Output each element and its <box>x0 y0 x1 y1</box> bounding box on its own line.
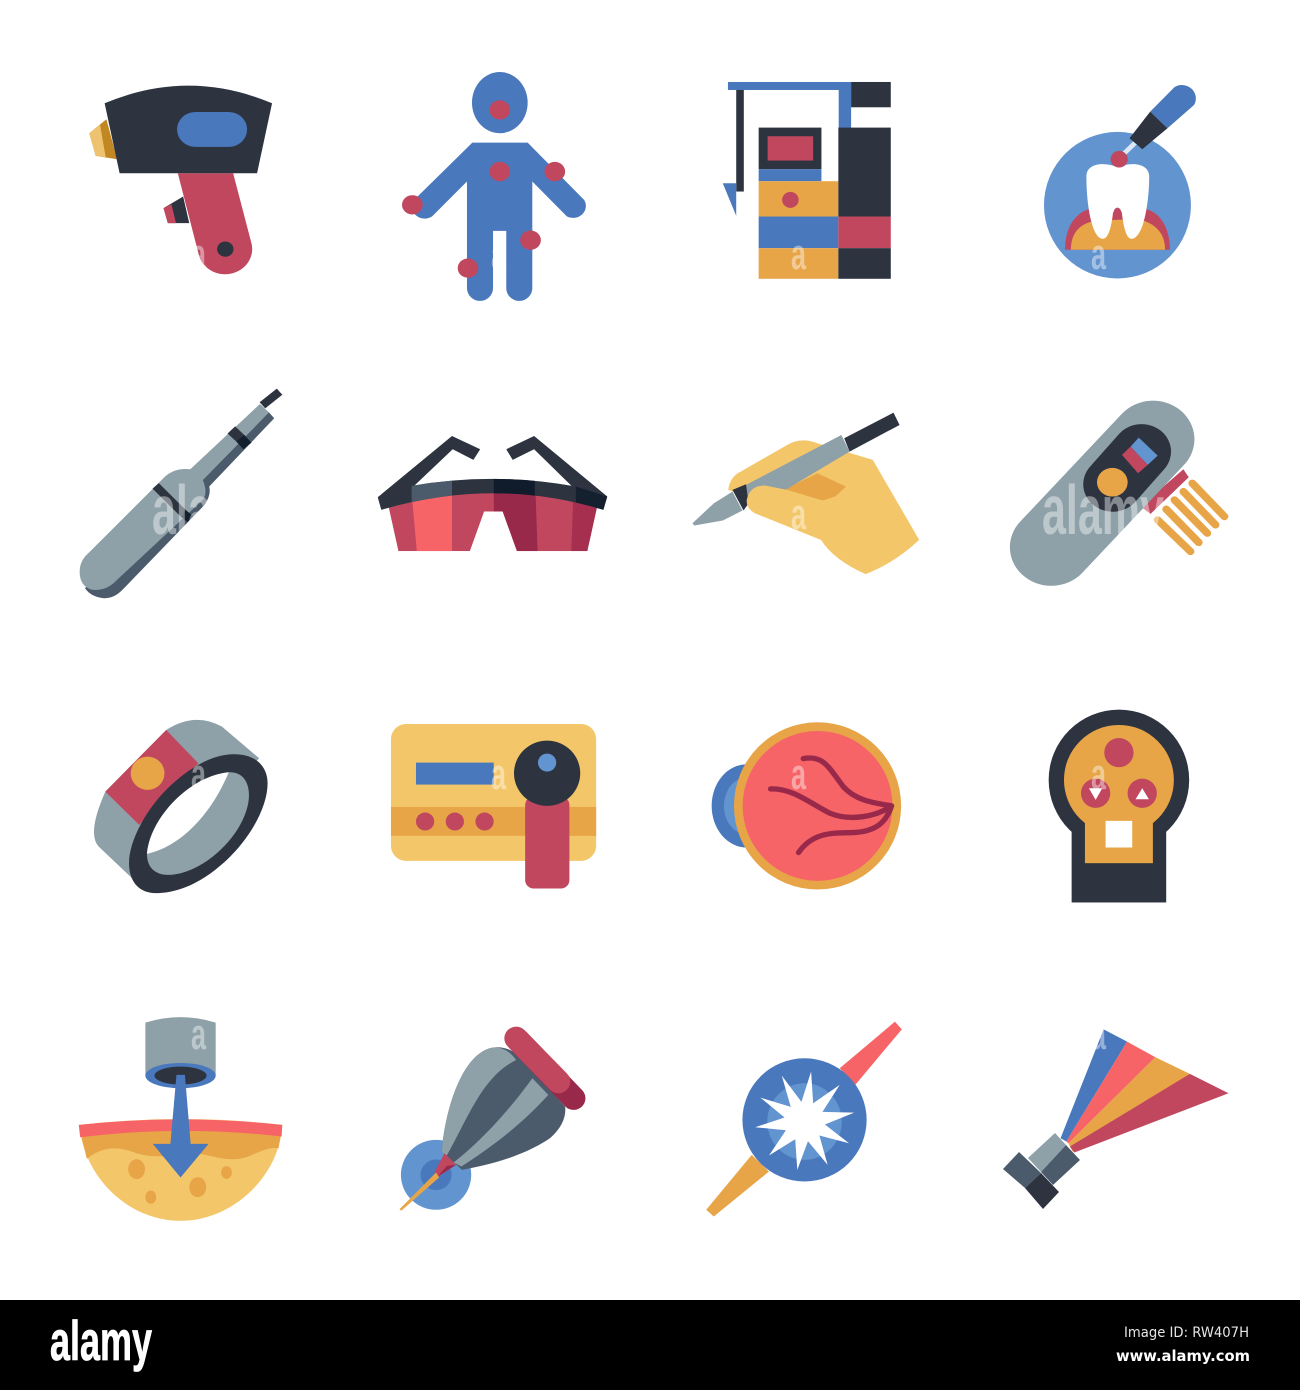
person body <box>412 143 586 301</box>
skin fat layer <box>79 1119 282 1221</box>
tooth background circle <box>1044 132 1191 278</box>
machine screen <box>759 128 821 169</box>
icon: laser applicator on target <box>400 1038 574 1211</box>
icon: protective glasses <box>374 436 610 553</box>
footer bar <box>0 1300 1300 1390</box>
watermark letters <box>152 230 1164 1059</box>
icon: laser control device <box>391 724 596 888</box>
icon: laser machine cabinet <box>723 82 891 279</box>
watermark letters: a <box>491 230 506 279</box>
spectrum beams <box>1061 1029 1229 1153</box>
laser aperture <box>145 1063 216 1088</box>
target circle <box>401 1140 471 1210</box>
machine top block <box>851 82 891 107</box>
ring dot <box>131 757 164 790</box>
scanner beams <box>1158 483 1224 552</box>
laser head <box>145 1017 216 1075</box>
applicator nozzle <box>434 1153 456 1176</box>
projector barrel <box>1028 1133 1080 1185</box>
device handle <box>525 797 569 888</box>
orange beam <box>706 1155 769 1216</box>
icon: dental laser on tooth <box>1044 85 1196 278</box>
applicator needle <box>400 1173 439 1211</box>
icon: laser penetrating skin <box>79 1017 282 1221</box>
watermark letters: a <box>191 230 206 279</box>
footer website: www.alamy.com <box>1116 1347 1250 1365</box>
treatment points <box>402 100 565 278</box>
remote square <box>1106 821 1132 848</box>
watermark letters: alamy <box>152 471 274 549</box>
icon: laser pen tool <box>80 392 280 598</box>
applicator cone <box>442 1047 565 1170</box>
icon: hand holding laser pen <box>692 413 919 574</box>
footer image id: Image ID: RW407H <box>1124 1325 1249 1341</box>
machine right stack <box>838 128 891 279</box>
coral beam <box>840 1022 902 1085</box>
watermark letters: a <box>191 1010 206 1059</box>
gum <box>1065 208 1170 250</box>
icon: laser burst <box>706 1022 902 1216</box>
icon: laser remote control <box>1049 710 1189 902</box>
icon: handheld laser scanner <box>1051 438 1224 552</box>
laser arrow <box>153 1075 209 1177</box>
pen tip <box>262 392 280 405</box>
handpiece display <box>177 112 247 147</box>
icon: laser hair removal handpiece <box>89 86 272 274</box>
treatment spot <box>1111 151 1128 168</box>
glasses frame <box>378 478 608 510</box>
burst star <box>755 1072 854 1170</box>
scanner display <box>1122 438 1158 473</box>
machine probe tip <box>723 183 736 216</box>
pen bands <box>156 430 247 519</box>
watermark letters: a <box>1091 750 1106 799</box>
pen barrel <box>746 435 850 505</box>
person head <box>472 72 528 133</box>
device buttons <box>416 813 494 831</box>
pen dark tip <box>1130 112 1167 149</box>
remote panel <box>1064 725 1174 863</box>
tooth <box>1086 164 1149 239</box>
ring red panel <box>105 730 198 825</box>
watermark letters: a <box>791 750 806 799</box>
handpiece head <box>105 86 272 173</box>
icon: laser spectrum projector <box>1003 1029 1229 1209</box>
finger <box>747 486 823 540</box>
handpiece trigger <box>164 197 189 223</box>
pen blue barrel <box>1150 85 1196 128</box>
hand <box>728 440 919 574</box>
remote arrows <box>1089 788 1149 800</box>
device knob light <box>538 754 556 772</box>
remote casing <box>1049 710 1189 902</box>
machine cable <box>736 90 744 192</box>
icon: body with treatment points <box>402 72 586 301</box>
scanner panel <box>1113 452 1142 484</box>
fat cells <box>128 1159 232 1204</box>
pen shadow side <box>85 412 274 598</box>
eye retina <box>743 731 892 881</box>
scanner body <box>1051 439 1153 547</box>
ring inner surface <box>147 772 249 875</box>
watermark letters: a <box>1091 230 1106 279</box>
footer logo: alamy <box>50 1309 152 1372</box>
laser needle <box>1123 142 1136 155</box>
handpiece button <box>217 241 234 257</box>
icon: eye with blood vessels <box>712 722 901 889</box>
pen body <box>80 404 269 590</box>
glasses arms <box>378 436 607 503</box>
handpiece orange emitter <box>89 119 117 159</box>
eye rim <box>734 722 901 889</box>
glasses lenses <box>388 493 597 552</box>
applicator cap <box>518 1040 574 1098</box>
hand shadow <box>780 473 846 501</box>
ring front face <box>129 754 268 893</box>
pen rear <box>844 413 900 452</box>
ring outer band <box>94 720 259 886</box>
machine left stack <box>759 169 838 279</box>
handpiece grip <box>178 173 252 274</box>
icon: laser ring <box>94 720 268 893</box>
burst disc <box>742 1058 867 1181</box>
jaw <box>1071 219 1165 250</box>
projector base <box>1003 1152 1059 1209</box>
device strip <box>391 807 596 836</box>
watermark letters: a <box>491 750 506 799</box>
skin dermis <box>80 1127 281 1159</box>
pen nib <box>692 492 742 526</box>
watermark letters: a <box>191 750 206 799</box>
blood vessels <box>771 758 891 853</box>
device case <box>391 724 596 861</box>
ring opening <box>147 772 229 854</box>
remote buttons <box>1081 738 1157 808</box>
scanner emitter <box>1141 469 1189 514</box>
device display <box>416 763 494 785</box>
watermark letters: a <box>791 230 806 279</box>
watermark letters: alamy <box>1042 471 1164 549</box>
scanner dial <box>1097 468 1128 497</box>
eye back <box>712 764 782 848</box>
machine arm <box>728 82 851 128</box>
pen band <box>732 484 749 511</box>
device knob <box>514 741 580 806</box>
watermark letters: a <box>1091 1010 1106 1059</box>
watermark letters: a <box>791 490 806 539</box>
skin surface <box>79 1119 282 1137</box>
